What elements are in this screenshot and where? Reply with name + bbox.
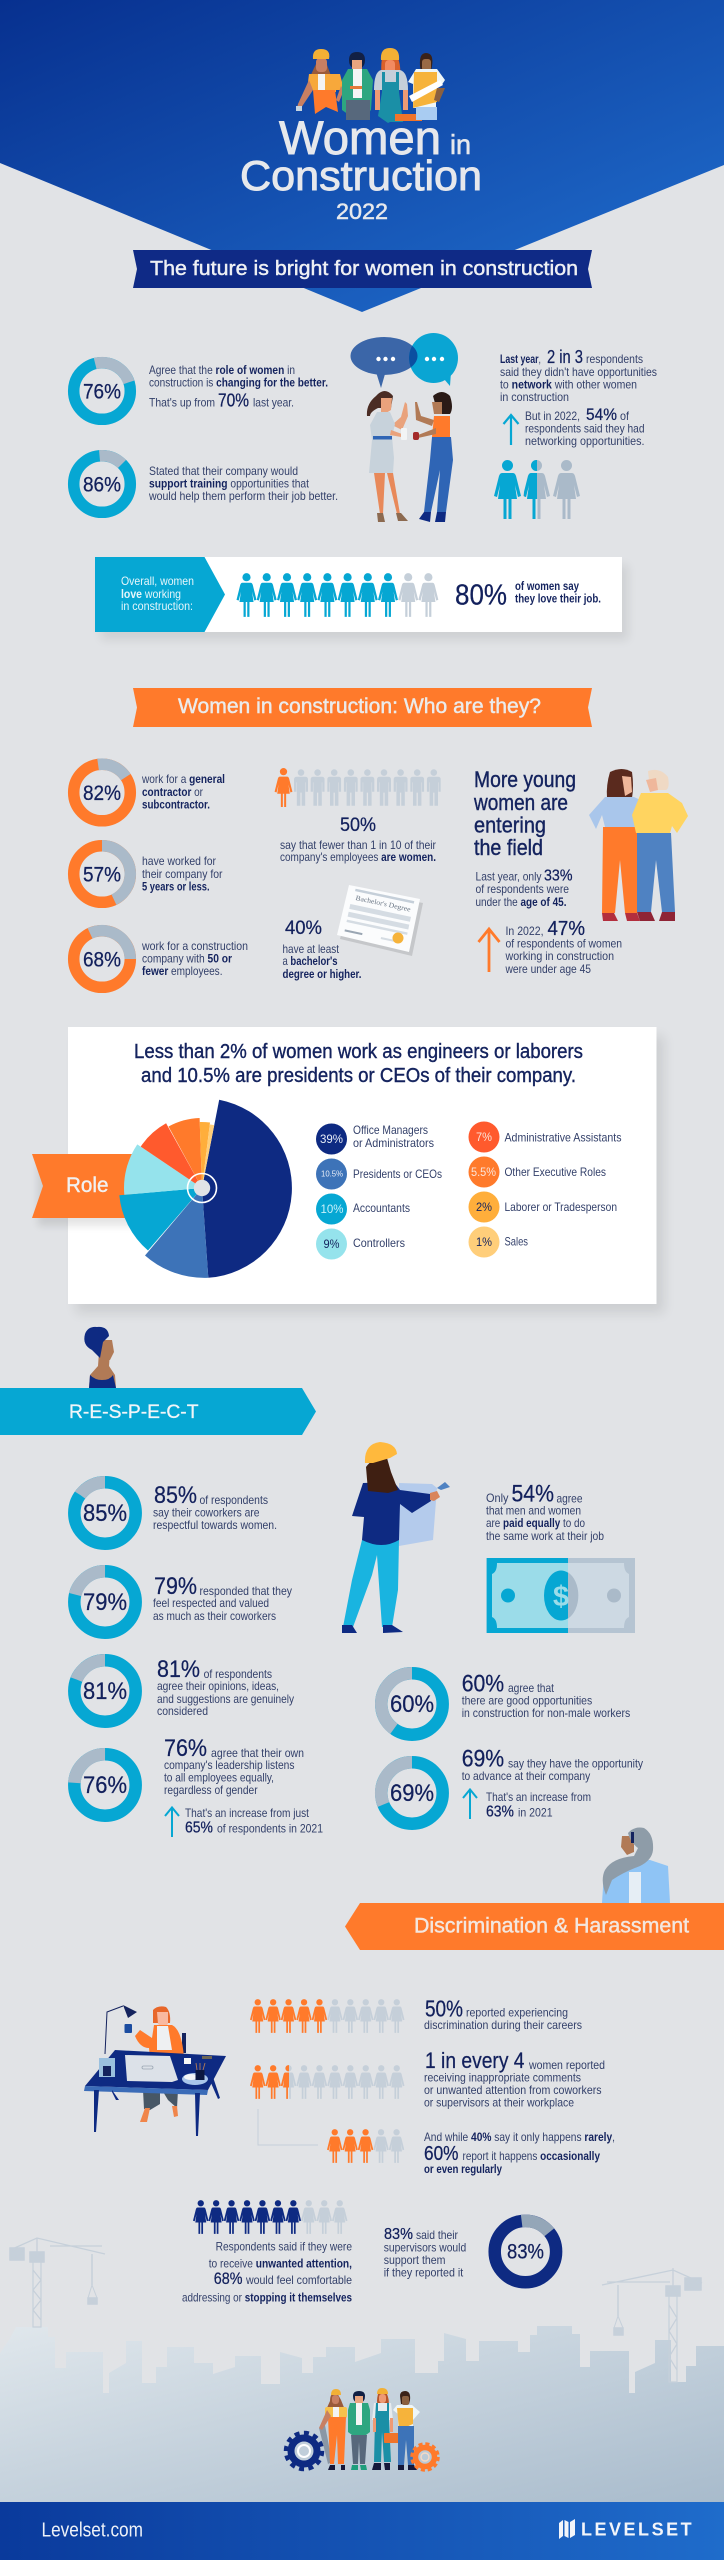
donut: 57% bbox=[74, 846, 130, 902]
text: 50 or fewer employees: work for a construction bbox=[141, 939, 248, 953]
text: 79% respected: as much as their coworkers bbox=[153, 1609, 276, 1623]
donut: 69% bbox=[372, 1753, 452, 1833]
illustration: workers with gears bbox=[286, 2388, 438, 2470]
donut: 81% bbox=[65, 1651, 145, 1731]
text: 79% respected: responded that they bbox=[200, 1584, 292, 1598]
text: role of women changing: construction is changing for the better. bbox=[149, 376, 328, 390]
text: networking 2022: of bbox=[620, 409, 630, 423]
text: 69% advance: 69% bbox=[462, 1746, 504, 1773]
text: role of women changing bbox=[149, 363, 328, 411]
legend: roles: 10.5% bbox=[321, 1170, 343, 1178]
heading banner: who are they: Women in construction: Who are they? bbox=[178, 695, 541, 718]
text: overall love working: in construction: bbox=[121, 599, 193, 613]
donut: 76% leadership bbox=[72, 1752, 138, 1818]
text: 79% respected: 79% bbox=[154, 1573, 197, 1600]
text: 1 in every 4: women reported bbox=[528, 2058, 605, 2072]
stat: 50% fewer than 1 in 10 bbox=[280, 815, 436, 864]
legend: roles: 1% bbox=[476, 1235, 492, 1249]
text: 50 or fewer employees: fewer employees. bbox=[142, 964, 222, 978]
text: 40% rarely 60% occasionally: And while 40% say it only happens rarely, bbox=[424, 2130, 615, 2144]
arrow up teal bbox=[504, 415, 518, 445]
text: support training: Stated that their company would bbox=[149, 464, 298, 478]
donut: 85%: 85% bbox=[83, 1500, 127, 1527]
icon row: 8 of 10 women bbox=[236, 573, 438, 617]
donut: 82%: 82% bbox=[83, 782, 121, 805]
heading: more young women bbox=[473, 767, 576, 860]
text: 50 or fewer employees: company with 50 or bbox=[142, 952, 232, 966]
donut: 60% bbox=[369, 1661, 455, 1747]
text: five years or less: have worked for bbox=[142, 854, 216, 868]
text: last year 33%: Last year, only bbox=[476, 870, 542, 884]
text: 83% supervisors: 83% bbox=[384, 2226, 413, 2243]
legend: roles: 9% bbox=[324, 1237, 340, 1251]
text: increase from 65%: of respondents in 2021 bbox=[217, 1822, 323, 1836]
donut: 79% bbox=[68, 1565, 142, 1639]
footer bar bbox=[0, 2502, 724, 2560]
icon: dollar bill bbox=[487, 1558, 635, 1633]
text: last year 33%: under the age of 45. bbox=[476, 895, 566, 909]
text: networking 2022: networking opportunities. bbox=[525, 434, 644, 448]
illustration: woman above respect banner bbox=[84, 1327, 116, 1388]
icon: navy gear bbox=[286, 2433, 322, 2469]
text: networking last year: respondents bbox=[586, 352, 643, 366]
donut: 68% bbox=[64, 921, 140, 997]
text: 68% comfortable: addressing or stopping it themselves bbox=[182, 2291, 352, 2305]
text: 50 or fewer employees bbox=[141, 939, 248, 978]
text: 76% leadership bbox=[164, 1735, 304, 1797]
text: 50% discrimination: 50% bbox=[425, 1996, 463, 2022]
text: paid equally: agree bbox=[556, 1492, 583, 1506]
text: 81% opinions: considered bbox=[157, 1704, 208, 1718]
text: general contractor bbox=[141, 772, 225, 812]
heading: less than 2% bbox=[134, 1040, 583, 1087]
text: 1 in every 4: 1 in every 4 bbox=[425, 2048, 524, 2073]
heading banner: respect bbox=[0, 1388, 316, 1435]
text: 76% leadership: 76% bbox=[164, 1735, 207, 1762]
stat: 50% fewer than 1 in 10: say that fewer than 1 in 10 of their bbox=[280, 838, 436, 852]
illustration: two women standing bbox=[589, 769, 688, 921]
text: last year 33%: 33% bbox=[544, 868, 572, 885]
legend: roles: Other Executive Roles bbox=[504, 1165, 606, 1179]
text: 40% rarely 60% occasionally: report it happens occasionally bbox=[462, 2149, 600, 2163]
stat: 40% bachelor's degree: degree or higher. bbox=[282, 967, 362, 981]
text: 81% opinions: agree their opinions, ideas, bbox=[157, 1679, 279, 1693]
text: paid equally: 54% bbox=[512, 1481, 554, 1508]
text: paid equally bbox=[486, 1481, 604, 1543]
text: 83% supervisors: if they reported it bbox=[384, 2266, 464, 2280]
icon row: 1 in 4 women bbox=[250, 2065, 404, 2099]
donut: 83% bbox=[491, 2217, 560, 2286]
legend: roles bbox=[316, 1122, 622, 1260]
text: increase from 63%: in 2021 bbox=[518, 1806, 553, 1820]
text: 81% opinions: of respondents bbox=[204, 1667, 272, 1681]
text: general contractor: contractor or bbox=[142, 785, 203, 799]
text: networking 2022 bbox=[525, 405, 644, 448]
donut: 81%: 81% bbox=[83, 1678, 127, 1705]
title: Construction bbox=[240, 152, 482, 199]
stat: 80%: 80% bbox=[455, 580, 507, 612]
text: 1 in every 4: or supervisors at their workplace bbox=[424, 2096, 574, 2110]
header chevron bbox=[0, 0, 724, 312]
text: 81% opinions bbox=[157, 1656, 294, 1718]
text: increase from 63% bbox=[486, 1790, 591, 1821]
text: 1 in every 4: or unwanted attention from coworkers bbox=[424, 2083, 602, 2097]
text: role of women changing: 70% bbox=[218, 391, 249, 411]
legend: roles: Sales bbox=[504, 1235, 528, 1249]
donut: 86% training bbox=[71, 453, 133, 515]
donut: 76% role of women bbox=[68, 357, 136, 425]
legend: roles: 2% bbox=[476, 1200, 492, 1214]
title: in bbox=[450, 129, 471, 160]
icon row: one woman among men bbox=[275, 768, 441, 807]
title bbox=[240, 111, 482, 224]
illustration: woman at desk bbox=[84, 2005, 226, 2136]
text: 60% opportunities: 60% bbox=[462, 1671, 504, 1698]
stat: 80% bbox=[455, 579, 601, 612]
icon row: three women bbox=[494, 460, 580, 519]
text: 83% supervisors: said their bbox=[416, 2228, 458, 2242]
legend: roles: 39% bbox=[320, 1132, 343, 1146]
donut: 86% training: 86% bbox=[83, 474, 121, 496]
text: 83% supervisors: supervisors would bbox=[384, 2241, 466, 2255]
text: 69% advance: to advance at their company bbox=[462, 1769, 590, 1783]
text: overall love working: love working bbox=[121, 587, 181, 601]
text: paid equally: are paid equally to do bbox=[486, 1516, 585, 1530]
text: networking 2022: 54% bbox=[586, 405, 617, 424]
text: in 2022 47%: of respondents of women bbox=[506, 937, 622, 951]
text: networking last year bbox=[500, 347, 657, 404]
heading banner: discrimination and harassment: Discrimination & Harassment bbox=[414, 1915, 689, 1938]
text: five years or less: 5 years or less. bbox=[142, 880, 210, 894]
text: in 2022 47%: In 2022, bbox=[506, 924, 544, 938]
donut: 69%: 69% bbox=[390, 1780, 434, 1807]
text: 81% opinions: and suggestions are genuinely bbox=[157, 1692, 294, 1706]
legend: roles: Accountants bbox=[353, 1201, 410, 1215]
legend: roles: Controllers bbox=[353, 1236, 405, 1250]
text: 50% discrimination: discrimination during their careers bbox=[424, 2018, 582, 2032]
text: 1 in every 4 bbox=[424, 2048, 605, 2110]
text: support training bbox=[148, 464, 338, 503]
text: 1 in every 4: receiving inappropriate comments bbox=[424, 2071, 581, 2085]
heading: more young women: the field bbox=[474, 835, 543, 860]
text: networking last year: said they didn't have opportunities bbox=[500, 365, 657, 379]
text: 76% leadership: regardless of gender bbox=[164, 1783, 258, 1797]
text: 83% supervisors bbox=[384, 2226, 466, 2280]
stat: 50% fewer than 1 in 10: 50% bbox=[340, 815, 376, 836]
icon: orange gear bbox=[412, 2444, 438, 2470]
text: increase from 63%: 63% bbox=[486, 1804, 514, 1821]
legend: roles: Presidents or CEOs bbox=[353, 1167, 442, 1181]
text: 76% leadership: agree that their own bbox=[211, 1746, 304, 1760]
illustration: construction woman with blueprint bbox=[342, 1442, 450, 1633]
heading: more young women: More young bbox=[474, 767, 576, 792]
donut: 79%: 79% bbox=[83, 1589, 127, 1616]
stat: 80%: they love their job. bbox=[515, 592, 601, 606]
text: paid equally: the same work at their job bbox=[486, 1529, 604, 1543]
icon row: 68% navy women bbox=[193, 2200, 348, 2234]
text: 40% rarely 60% occasionally bbox=[424, 2130, 615, 2176]
donut: 60%: 60% bbox=[390, 1691, 434, 1718]
text: 76% leadership: to all employees equally, bbox=[164, 1771, 274, 1785]
text: networking 2022: respondents said they had bbox=[525, 422, 644, 436]
heading banner: the future is bright: The future is bright for women in construction bbox=[150, 258, 578, 280]
heading: less than 2%: Less than 2% of women work as engineers or laborers bbox=[134, 1040, 583, 1063]
text: support training: support training opportunities that bbox=[149, 477, 310, 491]
donut: 76% leadership: 76% bbox=[83, 1772, 127, 1799]
text: 68% comfortable: would feel comfortable bbox=[245, 2273, 352, 2287]
donut: 83%: 83% bbox=[507, 2240, 544, 2264]
donut: 85% bbox=[62, 1470, 148, 1556]
title: Women bbox=[279, 111, 441, 164]
heading banner: the future is bright bbox=[133, 250, 592, 288]
icon: bachelor's degree certificate bbox=[337, 885, 423, 956]
text: overall love working: Overall, women bbox=[121, 574, 194, 588]
text: last year 33% bbox=[476, 868, 572, 909]
text: 69% advance: say they have the opportunity bbox=[508, 1756, 643, 1770]
text: 85% respectful bbox=[153, 1482, 277, 1532]
stat: 50% fewer than 1 in 10: company's employees are women. bbox=[280, 850, 436, 864]
text: increase from 63%: That's an increase from bbox=[486, 1790, 591, 1804]
text: 68% comfortable: Respondents said if they were bbox=[216, 2240, 352, 2254]
illustration: two women talking with speech bubbles bbox=[350, 333, 458, 522]
stat: 40% bachelor's degree: 40% bbox=[285, 918, 322, 939]
legend: roles: Administrative Assistants bbox=[504, 1131, 622, 1145]
text: five years or less: their company for bbox=[142, 867, 222, 881]
text: role of women changing: last year. bbox=[253, 396, 294, 410]
text: 83% supervisors: support them bbox=[384, 2253, 446, 2267]
pie chart: roles bbox=[119, 1100, 292, 1278]
text: 68% comfortable bbox=[182, 2240, 352, 2305]
text: 40% rarely 60% occasionally: 60% bbox=[424, 2143, 459, 2165]
text: general contractor: subcontractor. bbox=[142, 798, 210, 812]
text: networking last year: Last year, bbox=[500, 352, 541, 366]
icon: bachelor's degree certificate: Bachelor's Degree bbox=[355, 894, 411, 913]
text: 60% opportunities: in construction for non-male workers bbox=[462, 1706, 630, 1720]
text: 85% respectful: say their coworkers are bbox=[153, 1506, 260, 1520]
text: 85% respectful: 85% bbox=[154, 1482, 197, 1509]
heading banner: respect: R-E-S-P-E-C-T bbox=[69, 1401, 199, 1423]
legend: roles: 10% bbox=[320, 1202, 344, 1216]
heading banner: discrimination and harassment bbox=[345, 1903, 724, 1950]
text: in 2022 47%: were under age 45 bbox=[505, 962, 591, 976]
heading: more young women: entering bbox=[474, 813, 546, 838]
panel: women love working bbox=[95, 557, 628, 640]
crane left bbox=[10, 2238, 105, 2327]
stat: 40% bachelor's degree bbox=[282, 918, 362, 981]
title: 2022 bbox=[336, 199, 388, 224]
text: 60% opportunities: there are good opportunities bbox=[462, 1694, 592, 1708]
logo: levelset: LEVELSET bbox=[581, 2520, 692, 2540]
text: 85% respectful: respectful towards women. bbox=[153, 1518, 277, 1532]
icon row: 60% happens regularly bbox=[327, 2129, 404, 2163]
donut: 76% role of women: 76% bbox=[83, 380, 121, 404]
icon: dollar bill: $ bbox=[553, 1581, 569, 1613]
role ribbon: Role bbox=[66, 1174, 108, 1197]
text: overall love working bbox=[121, 574, 194, 613]
text: 40% rarely 60% occasionally: or even regularly bbox=[424, 2162, 502, 2176]
text: 79% respected: feel respected and valued bbox=[153, 1596, 269, 1610]
text: paid equally: that men and women bbox=[486, 1504, 581, 1518]
heading: less than 2%: and 10.5% are presidents or CEOs of their company. bbox=[141, 1064, 576, 1087]
legend: roles: 7% bbox=[476, 1130, 492, 1144]
text: role of women changing: Agree that the role of women in bbox=[149, 363, 295, 377]
legend: roles: Laborer or Tradesperson bbox=[504, 1200, 617, 1214]
heading: more young women: women are bbox=[473, 790, 568, 815]
text: 81% opinions: 81% bbox=[157, 1656, 200, 1683]
footer url: Levelset.com bbox=[42, 2520, 143, 2542]
text: networking last year: 2 in 3 bbox=[547, 347, 583, 367]
text: 68% comfortable: 68% bbox=[214, 2269, 242, 2288]
stat: 40% bachelor's degree: a bachelor's bbox=[282, 954, 338, 968]
text: increase from 65%: 65% bbox=[185, 1820, 213, 1837]
text: networking last year: in construction bbox=[500, 390, 569, 404]
text: last year 33%: of respondents were bbox=[476, 882, 569, 896]
text: five years or less bbox=[142, 854, 222, 894]
text: 76% leadership: company's leadership listens bbox=[164, 1758, 294, 1772]
crane right bbox=[602, 2268, 702, 2382]
illustration: four women workers bbox=[296, 48, 445, 123]
text: role of women changing: That's up from bbox=[149, 396, 215, 410]
stat: 40% bachelor's degree: have at least bbox=[282, 942, 340, 956]
arrow up teal 63 bbox=[463, 1790, 477, 1819]
text: 50% discrimination bbox=[424, 1996, 582, 2032]
text: increase from 65% bbox=[185, 1806, 323, 1837]
donut: 68%: 68% bbox=[83, 948, 121, 972]
panel: role chart card bbox=[32, 1027, 664, 1313]
text: support training: would help them perform their job better. bbox=[148, 489, 338, 503]
text: 69% advance bbox=[462, 1746, 643, 1783]
legend: roles: 5.5% bbox=[471, 1165, 496, 1179]
text: networking last year: to network with other women bbox=[500, 378, 637, 392]
legend: roles: or Administrators bbox=[353, 1136, 434, 1150]
heading banner: who are they bbox=[133, 688, 592, 727]
illustration: woman in hijab bbox=[602, 1828, 670, 1903]
stat: 80%: of women say bbox=[515, 579, 579, 593]
text: paid equally: Only bbox=[486, 1491, 508, 1505]
skyline bbox=[0, 2326, 724, 2502]
donut: 57%: 57% bbox=[83, 864, 121, 886]
legend: roles: Office Managers bbox=[353, 1123, 428, 1137]
text: in 2022 47% bbox=[505, 918, 622, 976]
arrow up teal 2021 bbox=[165, 1808, 179, 1837]
text: increase from 65%: That's an increase from just bbox=[185, 1806, 310, 1820]
icon row: 50% of women orange bbox=[250, 1999, 404, 2033]
text: in 2022 47%: 47% bbox=[548, 918, 585, 940]
arrow up orange bbox=[478, 929, 500, 972]
text: 60% opportunities bbox=[462, 1671, 630, 1720]
text: 85% respectful: of respondents bbox=[200, 1493, 268, 1507]
text: general contractor: work for a general bbox=[141, 772, 225, 786]
text: 60% opportunities: agree that bbox=[508, 1681, 555, 1695]
text: 68% comfortable: to receive unwanted attention, bbox=[209, 2257, 352, 2271]
role ribbon bbox=[32, 1154, 135, 1226]
text: 79% respected bbox=[153, 1573, 292, 1623]
donut: 82% bbox=[70, 761, 134, 824]
text: 50% discrimination: reported experiencing bbox=[466, 2006, 568, 2020]
text: in 2022 47%: working in construction bbox=[505, 949, 614, 963]
text: networking 2022: But in 2022, bbox=[525, 409, 580, 423]
